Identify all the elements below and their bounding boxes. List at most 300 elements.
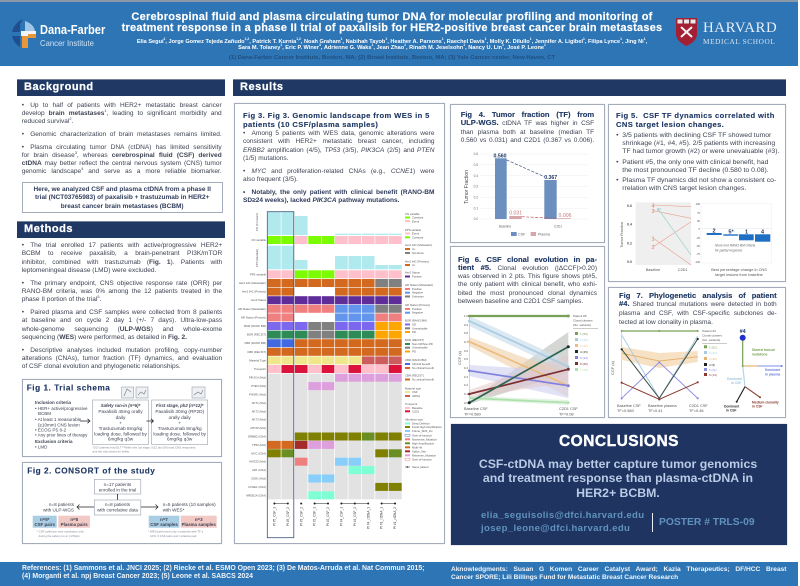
- box: safety run-in: 6mg/kg q3w: [108, 437, 134, 442]
- panel: conclusions: [451, 424, 787, 545]
- waterfall frame: 75: [697, 211, 701, 215]
- plot background: [636, 202, 691, 265]
- text: •: [616, 132, 619, 138]
- label: ULP-WGS: [43, 502, 75, 512]
- waterfall note: [715, 244, 755, 252]
- x labels: C2D1: [554, 225, 562, 229]
- row labels: HR Status (Metastatic): [238, 307, 266, 311]
- legend: Negative: [412, 311, 423, 315]
- y axis: 0.2: [627, 241, 632, 245]
- y axis: 0.3: [474, 185, 478, 189]
- text block: Fig 3 findings: •: [243, 189, 245, 196]
- text block: Fig 3 findings: [243, 130, 434, 204]
- acknowledgments: [451, 566, 786, 581]
- row labels: PIK3R1 (Mut): [249, 392, 266, 396]
- inclusion and exclusion criteria: Exclusion criteria: [35, 439, 73, 444]
- row labels: [238, 213, 267, 497]
- clone lines: [469, 316, 568, 403]
- contact emails: josep_leone@dfci.harvard.edu: [481, 523, 630, 534]
- callout: study aim: breast cancer brain metastases (BCBM): [61, 203, 184, 210]
- text block: Fig 3 findings: •: [243, 168, 245, 175]
- legend: 5 (11): [709, 368, 717, 372]
- conclusions statement: and treatment response than plasma-ctDNA in: [483, 471, 753, 485]
- row labels: PTEN (Mut): [251, 384, 266, 388]
- text block: Fig 7: #4. Shared truncal mutations were detected in both: [619, 299, 777, 308]
- text block: methods: The primary endpoint, CNS objective response rate (ORR) per: [30, 280, 222, 287]
- tree labels: Dominant: [724, 405, 740, 409]
- icon: Dana-Farber emblem: [12, 19, 36, 48]
- inclusion and exclusion criteria: [35, 400, 88, 450]
- legend: Positive: [412, 287, 422, 291]
- legend: Her2 IHC (Metastatic): [405, 243, 432, 247]
- legend: 5 (34): [580, 356, 588, 360]
- references: [22, 564, 424, 580]
- text block: background: •: [22, 131, 24, 138]
- text block: background: genomic landscape4 and serve as a more reliable biomarker.: [22, 166, 222, 175]
- text block: background: Plasma circulating tumor DNA (ctDNA) has limited sensitivity: [30, 144, 222, 151]
- bars: [495, 158, 571, 219]
- tree labels: in CSF: [731, 381, 741, 385]
- inclusion and exclusion criteria: BCBM: [38, 411, 51, 416]
- PPS bar track: [268, 246, 402, 269]
- cell separators: [281, 212, 388, 500]
- x labels: TF=0.41: [648, 408, 663, 413]
- legend: Clinical benefit: [412, 362, 430, 366]
- text block: Fig 5: [616, 132, 779, 192]
- heading: Fig 5: CNS target lesion changes.: [616, 120, 724, 128]
- legend: Deep Deletion: [412, 422, 430, 426]
- text block: background: ctDNA may better reflect the central nervous system (CNS) tumor: [22, 160, 222, 167]
- y axis: 0.8: [464, 331, 468, 335]
- label: WES: [163, 502, 216, 512]
- patient labels: 5*: [657, 207, 661, 212]
- box: enrolled: enrolled in the trial: [99, 488, 136, 493]
- row labels: MTOR (Mut): [250, 426, 266, 430]
- x labels: C2D1 CSF: [559, 406, 578, 411]
- callout: study aim: [22, 182, 223, 213]
- tree labels: in plasma: [765, 372, 780, 376]
- title: Cerebrospinal fluid and plasma circulating tumor DNA for molecular profiling and monitoring of: [131, 11, 653, 23]
- poster number: POSTER # TRLS-09: [659, 517, 755, 528]
- logo: Dana-Farber Cancer Institute: [12, 19, 106, 48]
- conclusions heading: CONCLUSIONS: [559, 432, 679, 450]
- row labels: CN variable: [251, 238, 266, 242]
- legend: 1 (59): [580, 332, 588, 336]
- value labels: 0.367: [544, 175, 557, 181]
- legend: Unevaluable: [412, 326, 428, 330]
- box: enrolled: n=17 patients: [104, 482, 132, 487]
- text block: background: •: [22, 144, 24, 151]
- text block: Fig 4: ULP-WGS. ctDNA TF was higher in CSF: [461, 118, 594, 127]
- tree labels: mutations: [752, 352, 768, 356]
- legend: Event: [412, 219, 419, 223]
- text block: Fig 5: rrelation with CNS target lesion changes.: [622, 185, 746, 192]
- footer banner: [0, 562, 798, 586]
- waterfall labels: 1: [745, 230, 748, 236]
- text block: Fig 6: between baseline and C2D1 CSF samples.: [458, 298, 583, 305]
- legend: Same patient: [412, 465, 429, 469]
- logo: Harvard Medical School: [676, 18, 777, 46]
- y axis: 0.0: [474, 217, 478, 221]
- box: plasma samples: Plasma samples: [182, 522, 216, 527]
- text block: background: Genomic characterization of brain metastases remains limited.: [30, 131, 222, 138]
- legend: CBR (RANO BM): [405, 358, 427, 362]
- box: enrolled: [94, 479, 141, 494]
- callout: study aim: trial (NCT03765983) of paxalisib + trastuzumab in HER2+: [35, 194, 209, 201]
- waterfall frame: -100: [695, 260, 701, 264]
- y axis: CCF (x): [610, 360, 615, 375]
- text block: methods: Descriptive analyses included mutation profiling, copy-number: [30, 347, 222, 354]
- tree labels: in CSF: [726, 409, 736, 413]
- legend: BOR (RANO BM): [405, 319, 427, 323]
- box: first stage phase 2: +: [178, 420, 181, 426]
- legend: Patient #5: [573, 314, 587, 318]
- y axis: 0.6: [464, 349, 468, 353]
- footnotes: Fig 2: 10%; 3 CSF pairs and 1 plasma pair: [150, 534, 196, 538]
- waterfall labels: 4: [761, 230, 765, 236]
- phylogenetic tree: #4: [740, 329, 747, 335]
- legend: HR Status (Primary): [405, 303, 430, 307]
- heading: Results: Results: [240, 81, 284, 93]
- box: correlative data: [94, 500, 141, 515]
- sample labels: Pt #5_CSF_2: [286, 507, 290, 526]
- text block: Fig 3 findings: (1/5) mutations.: [243, 155, 288, 162]
- row labels: CDH1 (Mut): [251, 476, 266, 480]
- heading: Fig 3: [243, 110, 430, 128]
- tree labels: [724, 348, 781, 413]
- box: safety run-in: +: [119, 420, 122, 426]
- legend: Event: [412, 232, 419, 236]
- title: treatment response in a phase II trial of paxalisib for HER2-positive breast cancer brain metastases: [122, 22, 662, 34]
- sample labels: Pt #1_ctDNA_1: [380, 507, 384, 529]
- waterfall caption: Best percentage change in CNS: [711, 267, 767, 272]
- legend: 1 (52): [709, 345, 717, 349]
- y axis: [627, 204, 632, 264]
- callout: study aim: Here, we analyzed CSF and plasma ctDNA from a phase II: [33, 186, 211, 192]
- legend: Material type: [405, 386, 421, 390]
- clinical annotation rows: [268, 279, 402, 373]
- legend: 6 (26): [580, 362, 588, 366]
- box: CSF pairs: n=5*: [40, 517, 50, 522]
- affiliations: (1) Dana-Farber Cancer Institute, Boston, MA; (2) Broad Institute, Boston, MA; (3) Yale Cancer center, New Haven, CT: [229, 55, 555, 61]
- text block: methods: alterations (CNAs), tumor fraction (TF) dynamics, and evaluation: [22, 355, 222, 362]
- panel: Fig 1 trial schema: [22, 379, 222, 457]
- waterfall frame: -75: [696, 252, 701, 256]
- y axis: Tumor Fraction: [464, 170, 470, 204]
- text block: methods: at baseline and on cycle 2 day 1 (+/- 7 days). Ultra-low-pass: [22, 317, 222, 324]
- text block: methods: sequencing (WES) were performed, as detailed in Fig. 2.: [22, 334, 187, 341]
- legend: Alteration type: [405, 418, 423, 422]
- text block: Fig 3 findings: Among 5 patients with WES data, genomic alterations were: [252, 130, 434, 137]
- legend: Patient #4: [702, 329, 716, 333]
- panel: Fig 7 phylogenetic analysis: [608, 287, 786, 418]
- y axis: 0.4: [464, 366, 468, 370]
- legend: Missense_Mutation: [412, 453, 437, 457]
- text block: Fig 6: Fig 6. CSF clonal evolution in pa-: [458, 254, 597, 264]
- y axis: 0.5: [464, 357, 468, 361]
- icons: brain and chart: [122, 387, 205, 398]
- heading: Background: [17, 79, 225, 96]
- heading: Methods: [17, 221, 225, 238]
- row labels: AKT3 (Mut): [252, 418, 266, 422]
- legend: Unevaluable: [412, 346, 428, 350]
- text block: Fig 5: Plasma TF dynamics did not show a consistent co-: [622, 177, 776, 184]
- legend: (No. variants): [573, 323, 591, 327]
- grid: [480, 154, 588, 219]
- text block: Fig 3 findings: •: [243, 130, 245, 137]
- contact emails: elia_seguisolis@dfci.harvard.edu: [481, 510, 644, 521]
- heading: Fig 5: Fig 5. CSF TF dynamics correlated with: [616, 110, 775, 120]
- text block: methods: •: [22, 242, 24, 249]
- text block: background: reduced survival2.: [22, 116, 73, 125]
- value labels: 0.031: [509, 210, 522, 216]
- panel: Fig 6 clonal evolution: [450, 246, 605, 418]
- text block: Fig 6: [458, 254, 597, 305]
- contact emails: [480, 510, 644, 534]
- text block: Fig 3 findings: also frequent (3/5).: [243, 176, 298, 183]
- legend: Baseline: [412, 406, 423, 410]
- legend: PPS variable: [405, 228, 422, 232]
- y axis title: Tumor Fraction: [620, 222, 624, 248]
- legend: 3+: [412, 263, 416, 267]
- legend: CN variable: [405, 212, 420, 216]
- box: first stage phase 2: orally daily: [169, 415, 191, 420]
- inclusion and exclusion criteria: • LMD: [35, 444, 48, 450]
- text block: Fig 3 findings: consistent with HER2+ metastatic breast cancer, including: [243, 138, 434, 145]
- box: correlative data: n=8 patients: [105, 502, 131, 507]
- y axis: 0.2: [464, 383, 468, 387]
- row labels: Timepoint: [254, 367, 266, 371]
- divider: [652, 513, 653, 532]
- text block: Fig 3 findings: Notably, the only patient with clinical benefit (RANO-BM: [252, 189, 434, 196]
- row labels: HR Status (Primary): [241, 315, 266, 319]
- footnotes: Fig 2: * WES performed only in patients with TF ≥: [148, 530, 204, 534]
- legend: [573, 314, 598, 372]
- text block: Fig 4: Fig 4. Tumor fraction (TF) from: [461, 110, 594, 119]
- references: (4) Morganti et al. npj Breast Cancer 2023; (5) Leone et al. SABCS 2024: [22, 573, 253, 580]
- box: safety run-in: Safety run-in (n=5)*: [101, 403, 141, 408]
- conclusions statement: [479, 456, 757, 500]
- legend: 3 (32): [709, 357, 717, 361]
- text block: methods: leptomeningeal disease (LMD) were excluded.: [22, 267, 156, 274]
- connector: [116, 494, 118, 500]
- tree labels: Shared truncal: [752, 348, 775, 352]
- conclusions statement: HER2+ BCBM.: [576, 486, 660, 500]
- legend: 4 (9): [709, 363, 715, 367]
- legend: HR Status (Metastatic): [405, 283, 433, 287]
- sample labels: Pt #4_CSF_1: [340, 507, 344, 526]
- x labels: C2D1 CSF: [689, 403, 708, 408]
- row labels: Her2 Status: [251, 298, 267, 302]
- row labels: MYC (CNA): [251, 451, 266, 455]
- row labels: PIK3CA (Mut): [249, 376, 266, 380]
- y axis: 0.3: [464, 375, 468, 379]
- text block: Fig 4: than plasma both at baseline (median TF: [461, 129, 594, 136]
- legend: (No. variants): [702, 338, 720, 342]
- legend: SD: [412, 322, 416, 326]
- legend: CSF: [518, 232, 526, 236]
- legend: 3+: [412, 247, 416, 251]
- sample labels: Pt #4_ctDNA_1: [366, 507, 370, 529]
- box: first stage phase 2: First stage, ph2 (n=12)*: [156, 403, 204, 408]
- x labels: [464, 406, 578, 416]
- clone lines: [622, 331, 698, 399]
- y axis: CCF (x): [457, 350, 462, 365]
- row labels: AR1 (CNA): [252, 468, 266, 472]
- legend: Negative: [412, 291, 423, 295]
- y axis: 0.6: [474, 152, 478, 156]
- inclusion and exclusion criteria: • ECOG PS 0-2: [35, 428, 67, 432]
- value labels: 0.560: [494, 153, 507, 159]
- panel: Fig 4 tumor fraction: [450, 104, 605, 243]
- sample labels: Pt #2_CSF_1: [313, 507, 317, 526]
- text block: background: •: [22, 102, 24, 109]
- sample labels: [272, 507, 397, 529]
- authors: Sara M. Tolaney1, Eric P. Winer3, Adrienne G. Waks1, Jean Zhao1, Rinath M. Jeselsohn1, Nancy U. Lin1, José P. Leone1: [238, 43, 546, 51]
- legend: Focal High Amplification: [412, 425, 442, 429]
- patient labels: 1: [651, 236, 655, 242]
- legend: Not Done: [412, 251, 424, 255]
- waterfall labels: 5*: [728, 230, 734, 236]
- inclusion and exclusion criteria: • Any prior lines of therapy: [35, 432, 88, 438]
- text block: methods: •: [22, 280, 24, 287]
- y axis: 0.0: [464, 401, 468, 405]
- legend: [511, 232, 550, 236]
- y axis: 0.7: [464, 340, 468, 344]
- waterfall frame: -25: [696, 236, 701, 240]
- waterfall frame: 0: [699, 227, 701, 231]
- text block: Fig 4: [460, 110, 594, 144]
- legend: Positive: [412, 307, 422, 311]
- legend: 6 (14): [709, 373, 717, 377]
- x labels: Baseline CSF: [464, 406, 488, 411]
- waterfall labels: [712, 228, 765, 236]
- heading: Fig 3: patients (10 CSF/plasma samples): [243, 120, 378, 128]
- footnotes: Fig 2: [37, 530, 204, 538]
- row labels: PPS (Variable): [255, 249, 259, 267]
- legend: C2D1: [412, 409, 420, 413]
- acknowledgments: Aknowledgments: Susan G Komen Career Catalyst Award; Kazia Therapeutics; DF/HCC Breast: [451, 566, 786, 573]
- panel: Fig 3 genomic landscape: [234, 103, 445, 544]
- text block: methods: •: [22, 347, 24, 354]
- waterfall labels: 2: [712, 228, 716, 234]
- trend lines: [507, 160, 544, 177]
- text block: Fig 3 findings: SD≥24 weeks), lacked PIK3CA pathway mutations.: [243, 197, 399, 204]
- label: WES: with WES*: [163, 508, 185, 512]
- box: safety run-in: Trastuzumab 8mg/kg: [99, 426, 143, 431]
- row labels: Her2 IHC (Primary): [242, 290, 266, 294]
- legend: 7 (13): [580, 368, 588, 372]
- heading: Methods: Methods: [24, 223, 73, 235]
- legend: No clinical benefit: [412, 378, 434, 382]
- text block: methods: Paired plasma and CSF samples were collected from 8 patients: [30, 309, 222, 316]
- text block: Fig 6: the only patient with clinical benefit, who exhi-: [458, 281, 597, 288]
- footnotes: Fig 2: * CSF collection was mandatory only: [37, 530, 84, 534]
- footnote: Fig 1: [92, 446, 196, 454]
- y axis: [464, 152, 478, 221]
- heading: Background: Background: [24, 81, 94, 93]
- waterfall caption: target lesions from baseline: [715, 272, 763, 277]
- heading: Fig 5: [616, 110, 775, 128]
- heading: Results: [233, 79, 786, 96]
- legend: ctDNA: [412, 394, 420, 398]
- authors: Elia Seguí1, Jorge Gomez Tejeda Zañudo1,2, Patrick T. Kurnia1,2, Noah Graham1, Nabihah Tayob1, Heather A. Parsons1, Raechel Davis1, Molly K. DiIullo1, Jennifer A. Ligibel1, Filipa Lynce1, Jing Ni1,: [137, 37, 647, 44]
- y axis: 0.9: [464, 323, 468, 327]
- y axis: 0.1: [464, 392, 468, 396]
- legend: Gain-of-function: [412, 457, 432, 461]
- panel: Fig 2 CONSORT: [22, 462, 222, 544]
- row labels: Material Type: [249, 358, 266, 362]
- box: CSF samples: CSF samples: [150, 522, 178, 527]
- legend: Multi Hit: [412, 445, 422, 449]
- text block: Fig 7: [619, 291, 777, 326]
- x labels: TF=0.580: [617, 408, 635, 413]
- text: •: [616, 159, 619, 166]
- variable rows: [268, 236, 402, 278]
- tree labels: in CSF: [752, 404, 762, 408]
- heading: Fig 1: Fig 1. Trial schema: [27, 384, 110, 392]
- footnotes: Fig 2: during the safety run-in (n=5pts): [38, 534, 80, 538]
- legend: [702, 329, 727, 377]
- waterfall bars: [707, 233, 770, 242]
- text block: Fig 4: 0.560 vs 0.031) and C2D1 (0.367 vs 0.006).: [461, 137, 594, 144]
- row labels: ERBB2 (CNA): [248, 434, 266, 438]
- legend: CBR (RECIST): [405, 374, 424, 378]
- row labels: TP53 (Mut): [252, 443, 266, 447]
- row labels: BOR (RECIST): [247, 333, 266, 337]
- same-patient connectors: [274, 503, 396, 504]
- legend: CSF: [412, 390, 418, 394]
- row labels: BOR (RANO BM): [244, 324, 266, 328]
- box: CSF pairs: [33, 516, 57, 528]
- y axis: [457, 314, 469, 405]
- patient labels: 2: [651, 245, 655, 251]
- text block: Fig 5: shrinkage (#1, #4, #5). 2/5 patients with increasing: [622, 140, 775, 147]
- x labels: [499, 225, 562, 229]
- legend: 2 (17): [709, 351, 717, 355]
- waterfall caption: [711, 267, 767, 277]
- box: correlative data: with correlative data: [97, 508, 138, 512]
- legend: Clonal clusters: [702, 334, 722, 338]
- text block: methods: RANO-BM criteria, was 0% among the 12 patients treated in the: [22, 288, 222, 295]
- legend: [405, 212, 442, 469]
- legend: Timepoint: [405, 402, 417, 406]
- x labels: [617, 403, 708, 413]
- text block: Fig 6: bited the most pronounced clonal dynamics: [458, 290, 597, 297]
- logo subtitle: Cancer Institute: [40, 38, 93, 48]
- text block: Fig 7: Fig 7. Phylogenetic analysis of patient: [619, 291, 777, 300]
- text block: Fig 3 findings: ERBB2 amplification (4/5), TP53 (3/5), PIK3CA (2/5) and PTEN: [243, 147, 434, 154]
- inclusion and exclusion criteria: • At least 1 measurable: [35, 417, 82, 422]
- sample labels: Pt #4_CSF_2: [353, 507, 357, 526]
- waterfall note: for partial response: [715, 248, 743, 252]
- text block: Fig 7: tected at low clonality in plasma.: [619, 319, 713, 326]
- arrow: criteria to safety run-in: [80, 419, 90, 423]
- y axis: 0.2: [474, 195, 478, 199]
- confidence bands: [469, 316, 568, 405]
- row labels: KMT2D (Mut): [249, 460, 266, 464]
- arrow: safety run-in to first stage: [146, 419, 154, 423]
- text block: background: Up to half of patients with HER2+ metastatic breast cancer: [30, 102, 222, 109]
- box: first stage phase 2: loading dose, followed by: [153, 432, 207, 436]
- logo subtitle: MEDICAL SCHOOL: [703, 36, 775, 46]
- conclusions statement: CSF-ctDNA may better capture tumor genomics: [479, 456, 757, 470]
- tree labels: Medium clonality: [752, 400, 779, 404]
- row labels: AKT2 (Mut): [252, 409, 266, 413]
- y axis: 0.1: [474, 206, 478, 210]
- waterfall frame: -50: [696, 244, 701, 248]
- text block: Fig 5: Patient #5, the only one with clinical benefit, had: [622, 159, 768, 166]
